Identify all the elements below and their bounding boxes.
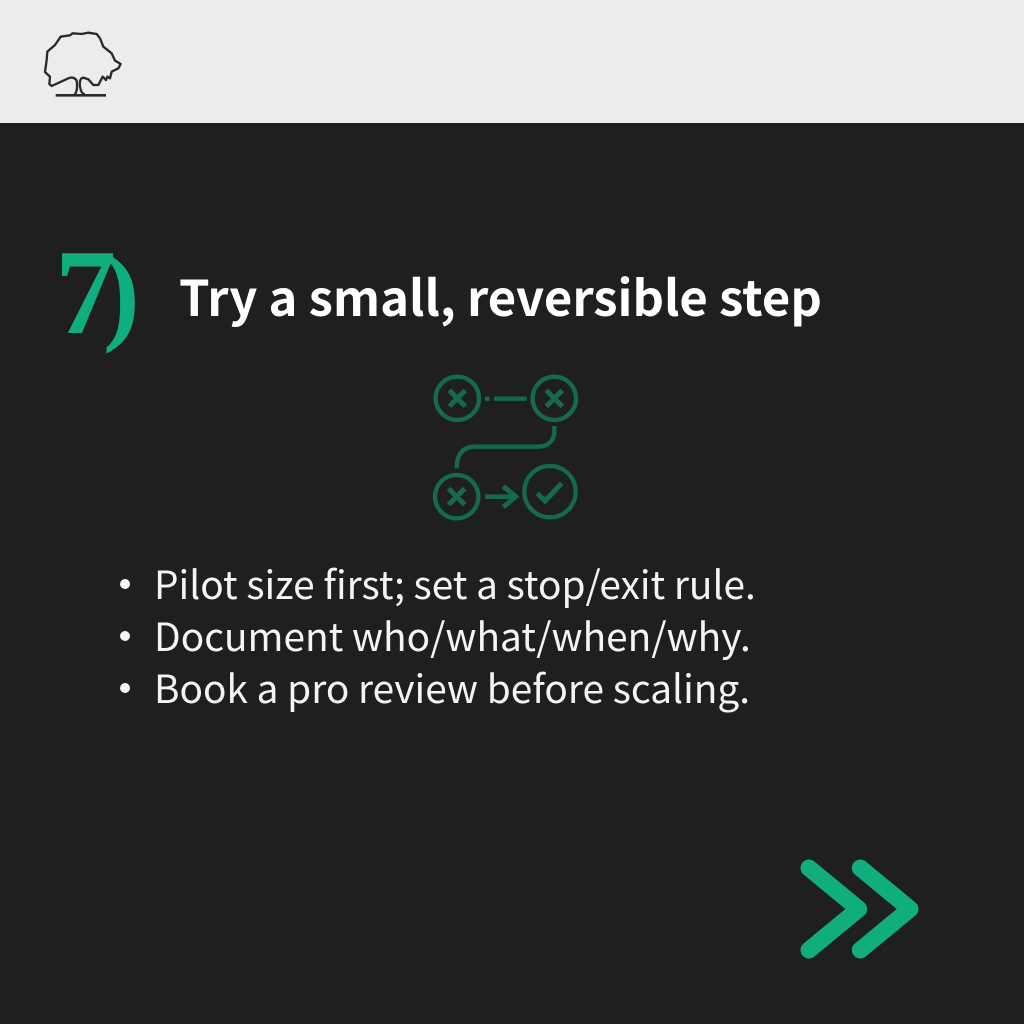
icon: double chevron arrow bbox=[800, 860, 918, 958]
title: Try a small, reversible step bbox=[179, 260, 822, 331]
closing parenthesis: ) bbox=[103, 232, 140, 354]
bullet 2: Document who/what/when/why. bbox=[154, 607, 751, 663]
digit seven: 7 bbox=[55, 225, 116, 360]
bullet 3: Book a pro review before scaling. bbox=[154, 659, 750, 715]
icon: path from failed attempts to success bbox=[432, 374, 578, 520]
bullet list bbox=[120, 555, 756, 715]
bullet 1: Pilot size first; set a stop/exit rule. bbox=[154, 555, 756, 611]
header band bbox=[0, 0, 1024, 123]
icon: tree logo bbox=[44, 32, 122, 97]
step number bbox=[55, 225, 140, 360]
